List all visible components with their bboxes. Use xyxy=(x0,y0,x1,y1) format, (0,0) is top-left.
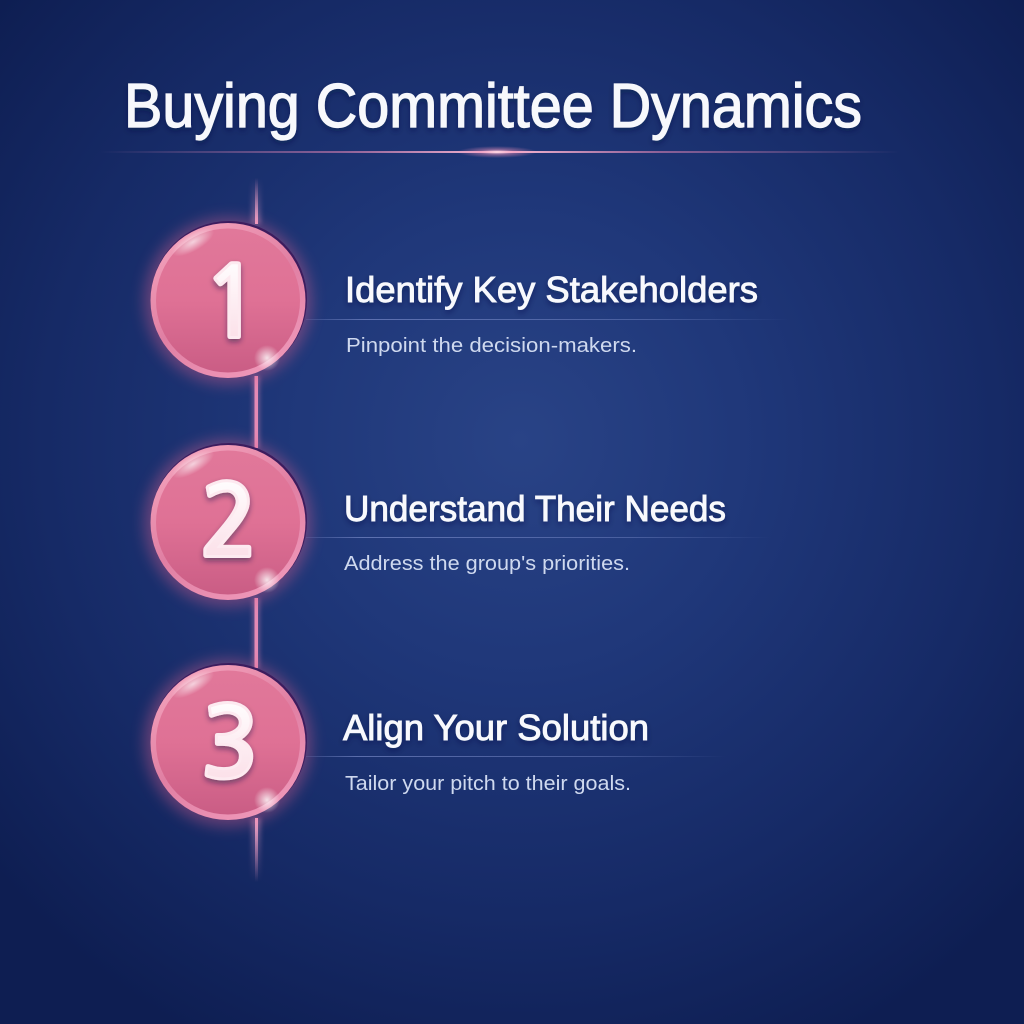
step 2 text xyxy=(306,488,772,575)
step 3 heading: Align Your Solution xyxy=(343,707,649,748)
step 1 description: Pinpoint the decision-makers. xyxy=(346,335,637,357)
step 3 description: Tailor your pitch to their goals. xyxy=(345,773,631,795)
step 1 heading: Identify Key Stakeholders xyxy=(345,269,758,310)
step 1 rule xyxy=(306,319,790,320)
step 1 text xyxy=(306,269,790,357)
step 2 rule xyxy=(306,537,772,538)
number 1: 1 xyxy=(202,255,262,352)
title: Buying Committee Dynamics xyxy=(124,72,862,141)
number 2: 2 xyxy=(199,474,259,571)
step 1 badge xyxy=(144,217,312,385)
step 3 text xyxy=(306,707,726,795)
step 3 rule xyxy=(306,756,726,757)
vertical timeline connector xyxy=(251,178,261,882)
step 3 badge xyxy=(144,659,312,827)
step 2 heading: Understand Their Needs xyxy=(344,488,726,529)
title underline with glow xyxy=(100,146,900,158)
step 2 badge xyxy=(144,439,312,607)
step 2 description: Address the group's priorities. xyxy=(344,553,630,575)
number 3: 3 xyxy=(200,696,260,793)
